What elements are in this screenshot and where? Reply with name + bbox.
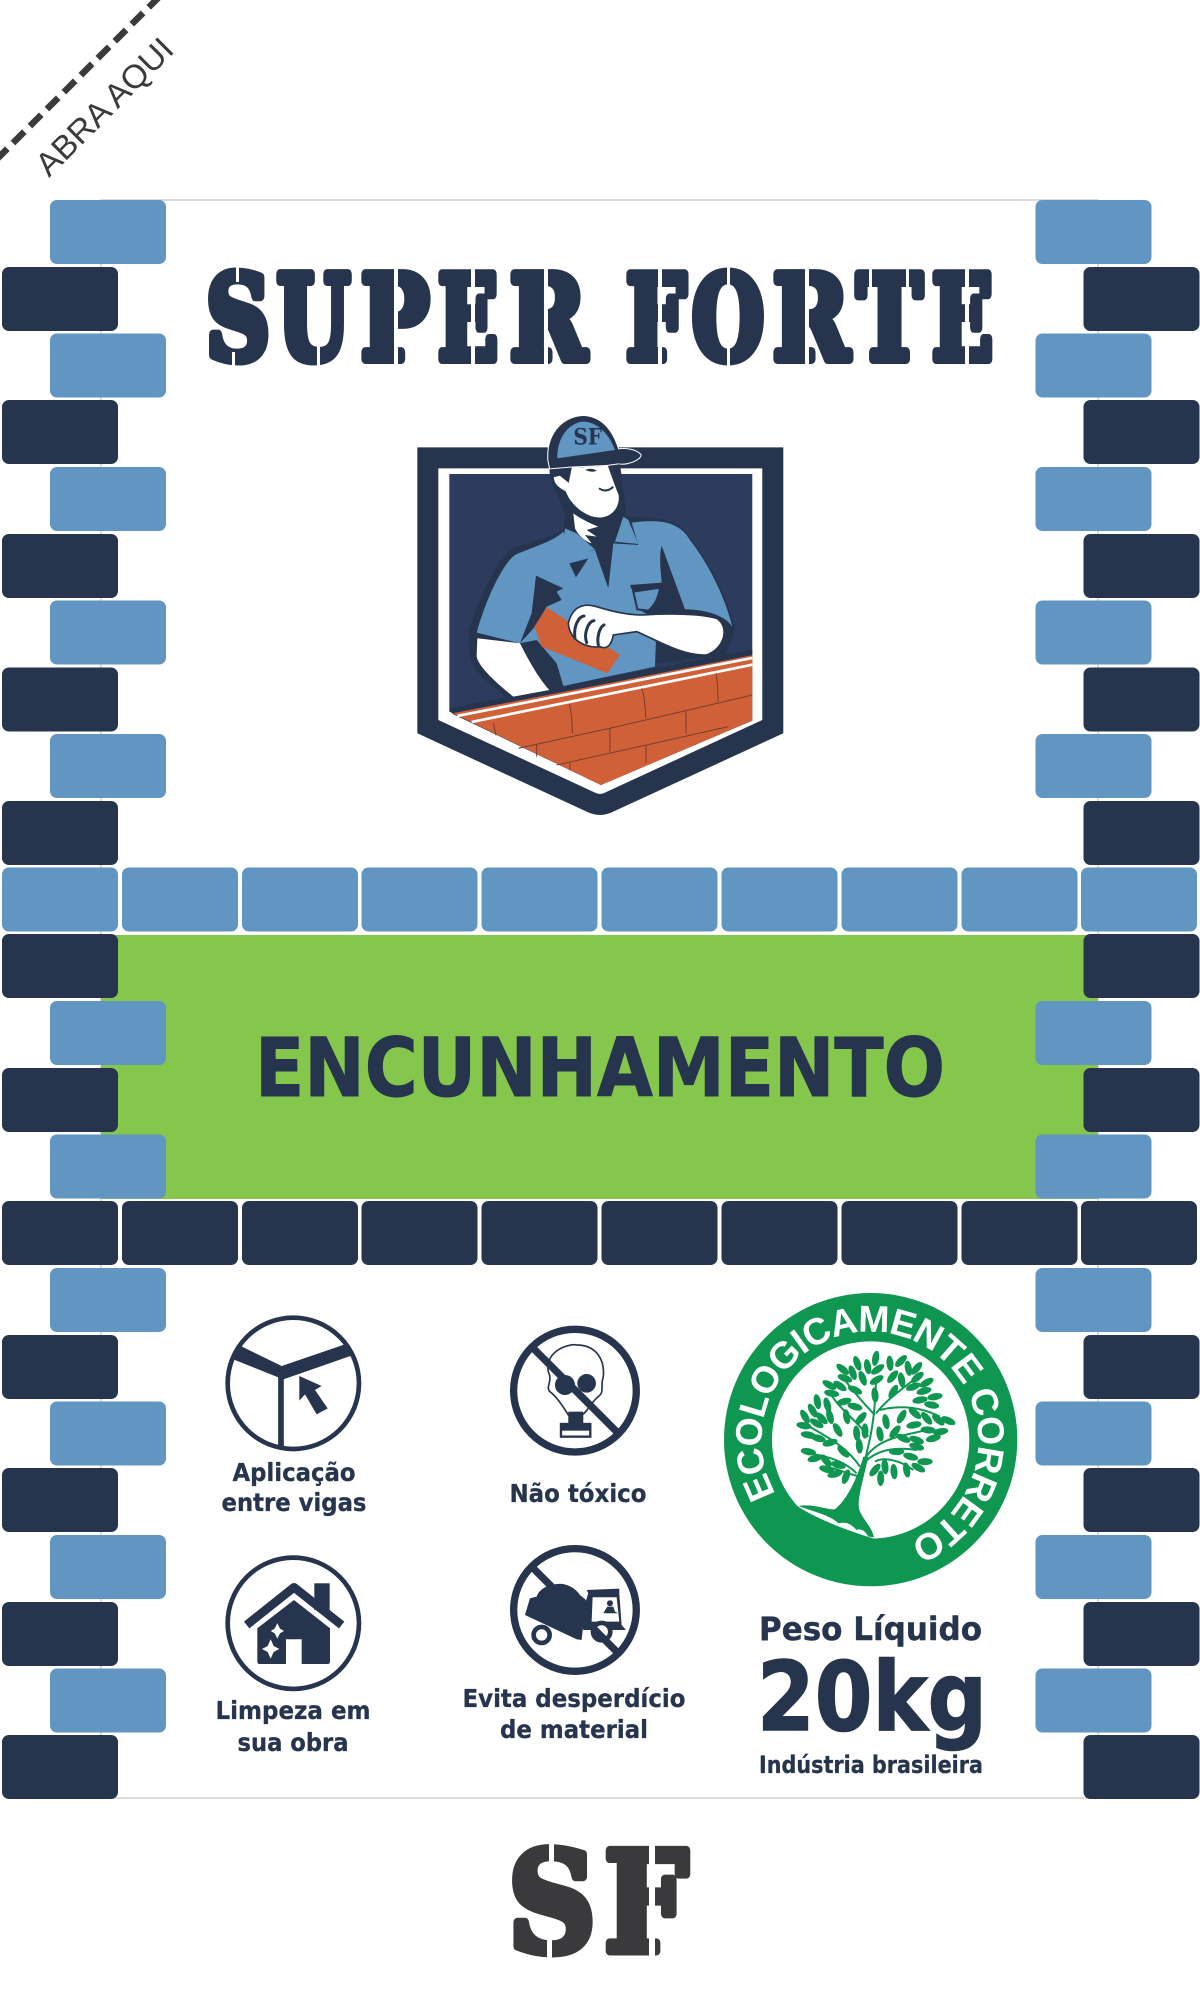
title: super forte stencil: T (857, 251, 922, 387)
title: super forte stencil: E (932, 251, 993, 387)
logo: shield with bricklayer: SF (573, 425, 602, 451)
title: super forte stencil: E (438, 251, 498, 387)
label: aplicacao entre vigas (222, 1458, 366, 1517)
title: super forte stencil: O (692, 251, 764, 387)
net weight block: 20kg (757, 1643, 987, 1753)
label: abra aqui: ABRA AQUI (28, 30, 181, 183)
badge: ecologicamente correto (724, 1293, 1018, 1586)
bottom logo: sf stencil: F (604, 1821, 688, 1984)
panel: green product band (101, 935, 1098, 1199)
dark brick row (2, 1201, 1197, 1265)
label: limpeza em sua obra: sua obra (238, 1728, 348, 1757)
blue brick row (2, 868, 1197, 932)
label: aplicacao entre vigas: Aplicação (232, 1458, 356, 1487)
shield outer (417, 447, 783, 815)
left brick column (2, 200, 166, 1799)
right brick column (1036, 200, 1200, 1799)
title: super forte stencil: U (277, 251, 350, 387)
bottom logo: sf stencil: S (508, 1821, 596, 1984)
label: limpeza em sua obra (216, 1696, 370, 1757)
label: evita desperdicio de material: Evita desperdício (462, 1684, 686, 1713)
net weight block: Peso Líquido (759, 1610, 982, 1648)
title: super forte stencil (206, 251, 993, 387)
forearm far (477, 638, 549, 697)
label: evita desperdicio de material: de material (500, 1715, 648, 1744)
title: super forte stencil: P (361, 251, 429, 387)
bottom logo: sf stencil (508, 1821, 688, 1984)
badge text: ECOLOGICAMENTE CORRETO (736, 1306, 1004, 1560)
cap (548, 416, 641, 468)
label: limpeza em sua obra: Limpeza em (216, 1696, 370, 1725)
net weight block: Indústria brasileira (759, 1751, 983, 1779)
arm and hand (568, 605, 724, 655)
shield navy field (449, 474, 752, 785)
wall (449, 649, 752, 785)
title: super forte stencil: R (773, 251, 850, 387)
worker silhouette (468, 460, 735, 700)
shirt (477, 521, 732, 686)
icon: clean house (228, 1558, 359, 1689)
collars (563, 528, 595, 557)
label: nao toxico: Não tóxico (510, 1479, 646, 1508)
title: super forte stencil: S (206, 251, 270, 387)
face (553, 465, 619, 518)
icon: not toxic (514, 1329, 636, 1452)
shield white inset (438, 468, 762, 794)
panel: front package frame (101, 200, 1098, 1798)
label: aplicacao entre vigas: entre vigas (222, 1488, 366, 1517)
net weight block (757, 1610, 987, 1779)
held brick (534, 607, 620, 673)
tree (796, 1350, 957, 1537)
tear line: dashed opening mark (0, 0, 160, 160)
title: super forte stencil: F (626, 251, 686, 387)
icon: application between beams (228, 1318, 359, 1449)
icon: avoids material waste (514, 1549, 636, 1671)
title: super forte stencil: R (510, 251, 587, 387)
logo: shield with bricklayer (417, 416, 783, 815)
label: evita desperdicio de material (462, 1684, 686, 1744)
product name: encunhamento: ENCUNHAMENTO (255, 1022, 945, 1116)
neck (573, 513, 598, 543)
